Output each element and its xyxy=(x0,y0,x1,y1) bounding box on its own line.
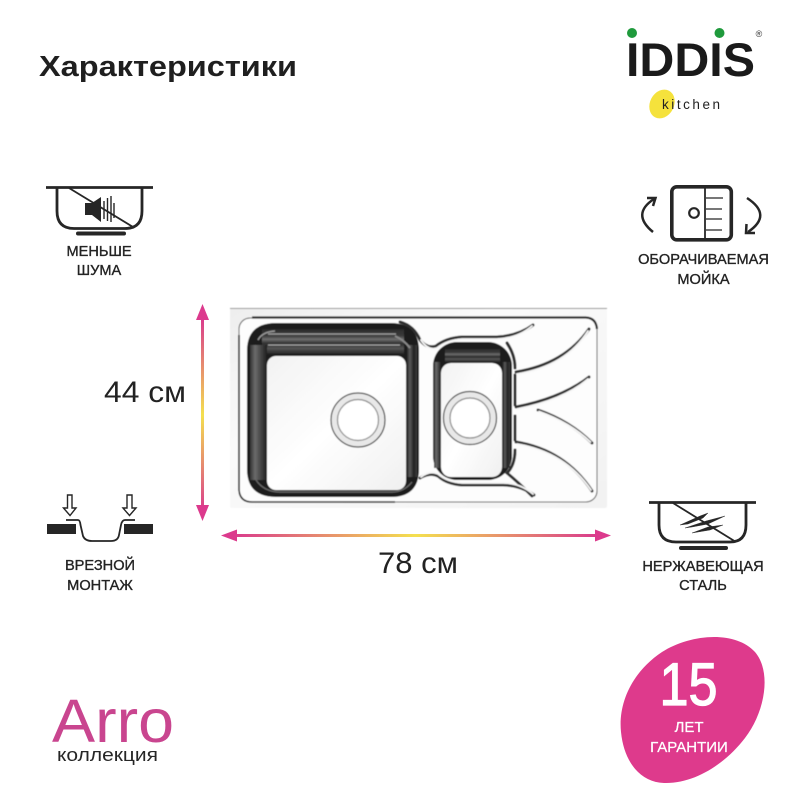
logo: IDDIS kitchen: ® xyxy=(756,29,763,39)
label: less noise: МЕНЬШЕ xyxy=(66,244,132,260)
label: reversible sink: МОЙКА xyxy=(677,270,730,288)
label: undermount installation: МОНТАЖ xyxy=(67,578,133,594)
logo wordmark: IDDIS xyxy=(626,33,755,86)
warranty text: ГАРАНТИИ xyxy=(650,739,728,756)
label: less noise: ШУМА xyxy=(77,263,122,279)
badge blob xyxy=(621,637,765,783)
arrow: width dimension xyxy=(221,530,611,542)
sink plate xyxy=(230,308,607,508)
title: Характеристики xyxy=(39,51,297,83)
logo: IDDIS kitchen: kitchen xyxy=(662,97,720,112)
label: stainless steel: СТАЛЬ xyxy=(679,578,727,594)
icon: undermount installation xyxy=(47,495,153,541)
icon: reversible sink xyxy=(642,187,760,240)
sink rim xyxy=(239,318,597,502)
label: undermount installation: ВРЕЗНОЙ xyxy=(65,556,135,574)
dimension: 78 cm: 78 см xyxy=(378,547,458,580)
drainboard grooves xyxy=(400,322,592,496)
label: stainless steel: НЕРЖАВЕЮЩАЯ xyxy=(642,559,764,575)
years number: 15 xyxy=(660,651,718,718)
icon: stainless steel xyxy=(649,502,756,548)
warranty text: ЛЕТ xyxy=(674,719,704,736)
small bowl xyxy=(433,342,512,480)
sink photo xyxy=(230,308,607,508)
big bowl xyxy=(247,323,419,497)
collection caption: коллекция xyxy=(57,745,158,765)
dimension: 44 cm: 44 см xyxy=(104,376,186,409)
icon: less noise xyxy=(46,188,153,234)
warranty badge xyxy=(621,637,765,783)
label: reversible sink: ОБОРАЧИВАЕМАЯ xyxy=(638,252,769,268)
arrow: height dimension xyxy=(196,304,209,521)
collection name xyxy=(52,687,174,765)
collection title: Arro xyxy=(52,687,174,755)
logo: IDDIS kitchen xyxy=(626,28,763,123)
